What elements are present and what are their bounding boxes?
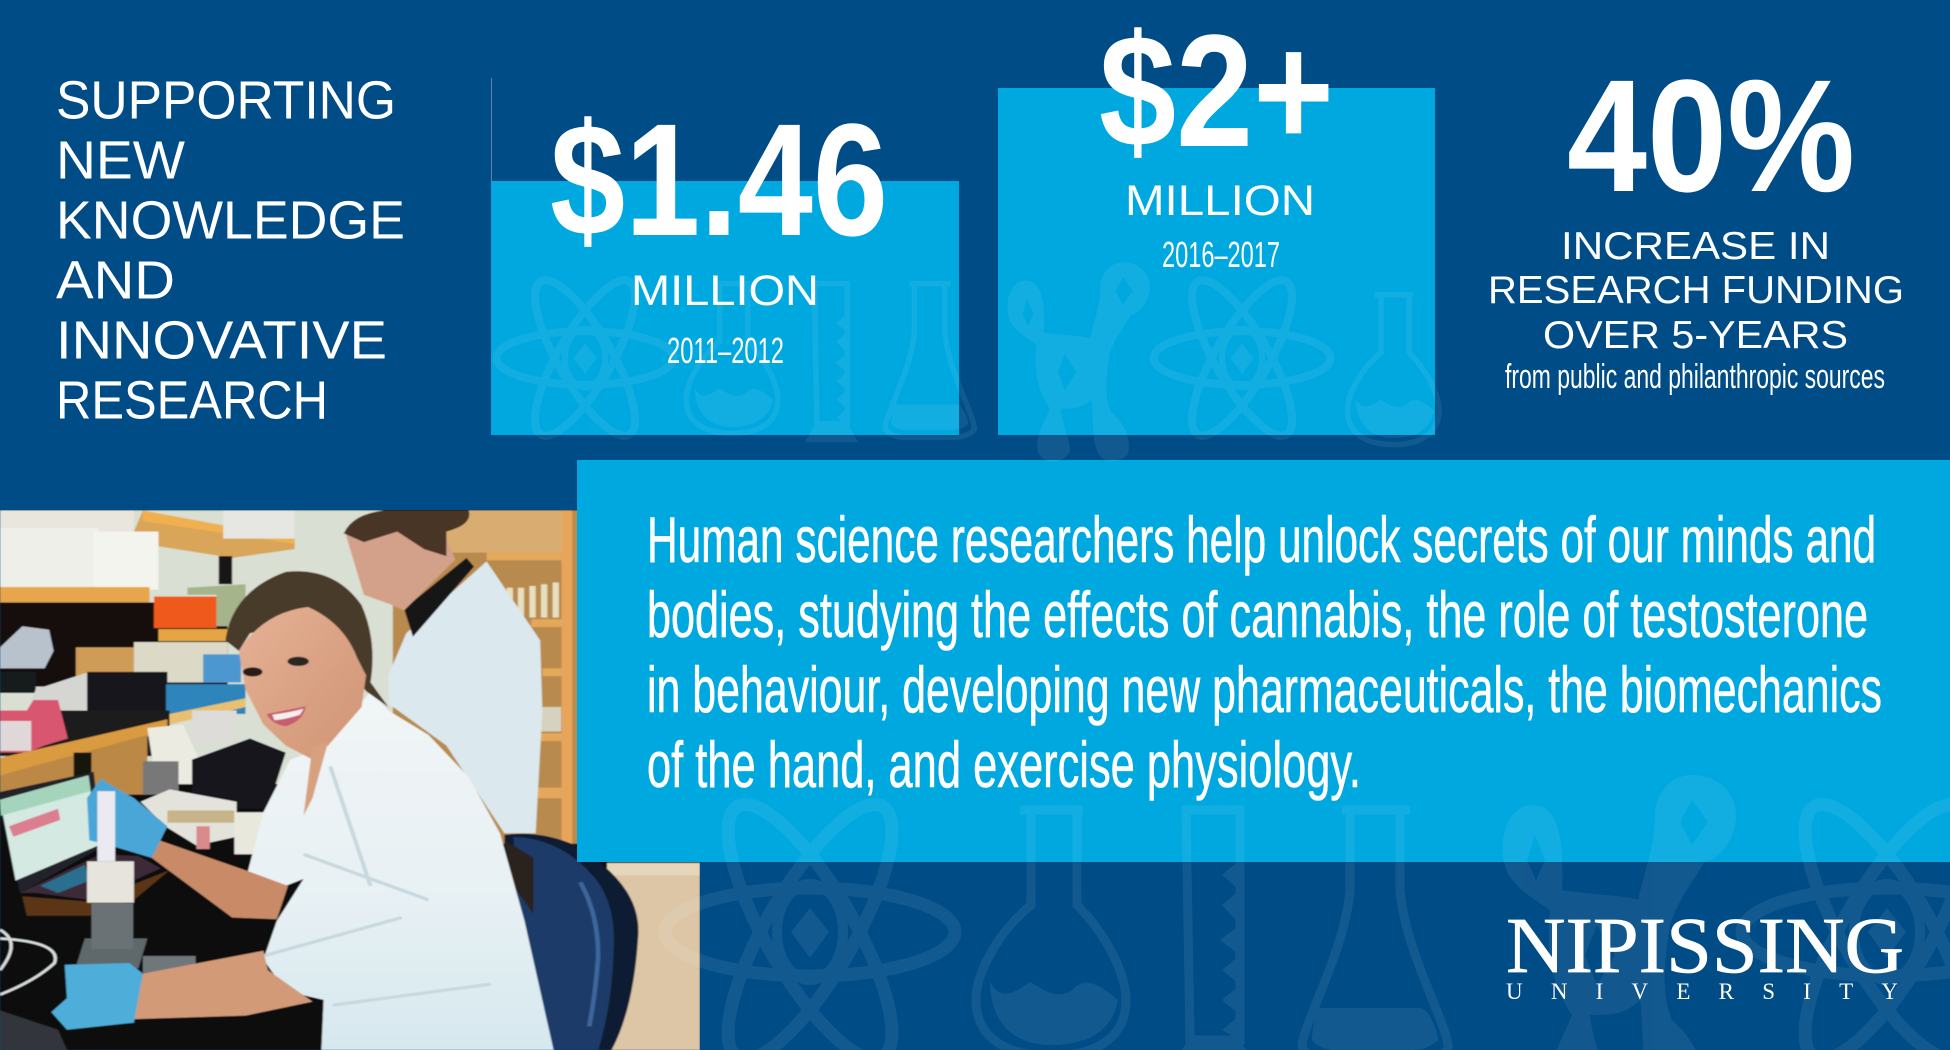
panel: stat box 2011-2012: [491, 181, 959, 435]
photo: researchers in lab: [0, 500, 700, 1050]
stat: $1.46 million: 2011–2012: [667, 330, 784, 371]
chair: [504, 834, 638, 1050]
stat: 40% increase: OVER 5-YEARS: [1543, 314, 1848, 357]
stat: $2+ million: $2+: [1099, 1, 1334, 180]
heading: AND: [56, 250, 175, 310]
research description text: of the hand, and exercise physiology.: [647, 728, 1361, 801]
stat: $2+ million: MILLION: [1125, 177, 1315, 225]
wall and base: [0, 500, 700, 1050]
heading: KNOWLEDGE: [56, 190, 405, 250]
research description text: [647, 503, 1882, 801]
stat: $1.46 million: $1.46: [550, 90, 888, 269]
logo: Nipissing University: UNIVERSITY: [1506, 979, 1898, 1004]
woman in lab coat: [51, 571, 554, 1050]
heading: SUPPORTING: [56, 70, 396, 130]
stat: $2+ million: 2016–2017: [1162, 234, 1280, 275]
panel: stat box 2016-2017: [998, 88, 1435, 435]
bench items: [0, 789, 270, 1050]
stat: $2+ million: [1099, 1, 1334, 275]
man in lab coat: [344, 511, 542, 833]
stat: $1.46 million: [550, 90, 888, 371]
stat: 40% increase: 40%: [1567, 46, 1855, 225]
stat: 40% increase: RESEARCH FUNDING: [1488, 269, 1904, 312]
heading: NEW: [56, 130, 185, 190]
stat: 40% increase: INCREASE IN: [1561, 225, 1830, 268]
heading: RESEARCH: [56, 370, 328, 430]
panel: research description: [577, 460, 1950, 862]
stat: $1.46 million: MILLION: [631, 267, 819, 315]
watermark: science icons lower strip: [665, 775, 1950, 1050]
heading: [56, 70, 405, 430]
watermark: science icons upper strip: [497, 262, 1439, 462]
stat: 40% increase: [1488, 46, 1904, 396]
laptop: [0, 772, 170, 916]
heading: INNOVATIVE: [56, 310, 387, 370]
divider line beside stat 1: [491, 78, 492, 181]
logo: Nipissing University: NIPISSING: [1506, 903, 1904, 990]
left shelving: [0, 511, 295, 809]
